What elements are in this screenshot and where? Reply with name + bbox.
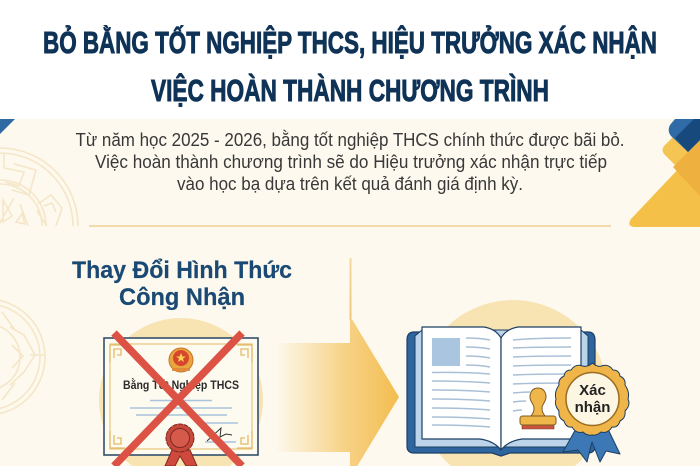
certificate corners: [110, 345, 252, 448]
ornament: upper left drum pattern: [0, 147, 79, 226]
certificate title: Bằng Tốt Nghiệp THCS: [123, 379, 239, 392]
intro text: Từ năm học 2025 - 2026, bằng tốt nghiệp THCS chính thức được bãi bỏ.: [76, 129, 624, 150]
intro text: vào học bạ dựa trên kết quả đánh giá định kỳ.: [177, 174, 523, 194]
decorative corner shapes: top right: [629, 119, 700, 227]
divider: [89, 225, 611, 227]
certificate: [104, 338, 258, 466]
signature: [207, 428, 232, 441]
intro text: Việc hoàn thành chương trình sẽ do Hiệu trưởng xác nhận trực tiếp: [95, 152, 607, 172]
background panel: [0, 119, 700, 466]
open book: [407, 327, 629, 462]
book cover: [407, 332, 595, 456]
seal text: nhận: [575, 399, 610, 416]
gold seal: [555, 363, 629, 435]
page edges: [415, 330, 588, 447]
corner triangle: top left: [0, 119, 15, 134]
certificate lines: [130, 400, 238, 442]
right circle backdrop: [418, 300, 608, 466]
right page: [501, 327, 581, 450]
left page text lines: [432, 338, 490, 427]
photo box: [432, 338, 460, 366]
seal text: Xác: [579, 382, 606, 399]
vertical separator: [350, 258, 352, 320]
section heading: [72, 257, 292, 311]
emblem: [169, 348, 193, 372]
seal text: [575, 382, 610, 416]
title: VIỆC HOÀN THÀNH CHƯƠNG TRÌNH: [151, 72, 549, 108]
red cross: [114, 333, 242, 466]
arrow: [275, 316, 399, 466]
stamp: [520, 388, 556, 429]
right page text lines: [513, 338, 571, 411]
red seal: [165, 424, 197, 466]
title: [43, 24, 657, 108]
section heading: Công Nhận: [119, 284, 245, 311]
intro text: [76, 129, 624, 194]
left page: [422, 327, 501, 450]
ornament: lower left drum pattern: [0, 299, 45, 415]
ribbon: [563, 425, 620, 462]
section heading: Thay Đổi Hình Thức: [72, 257, 292, 284]
left circle backdrop: [99, 318, 263, 466]
